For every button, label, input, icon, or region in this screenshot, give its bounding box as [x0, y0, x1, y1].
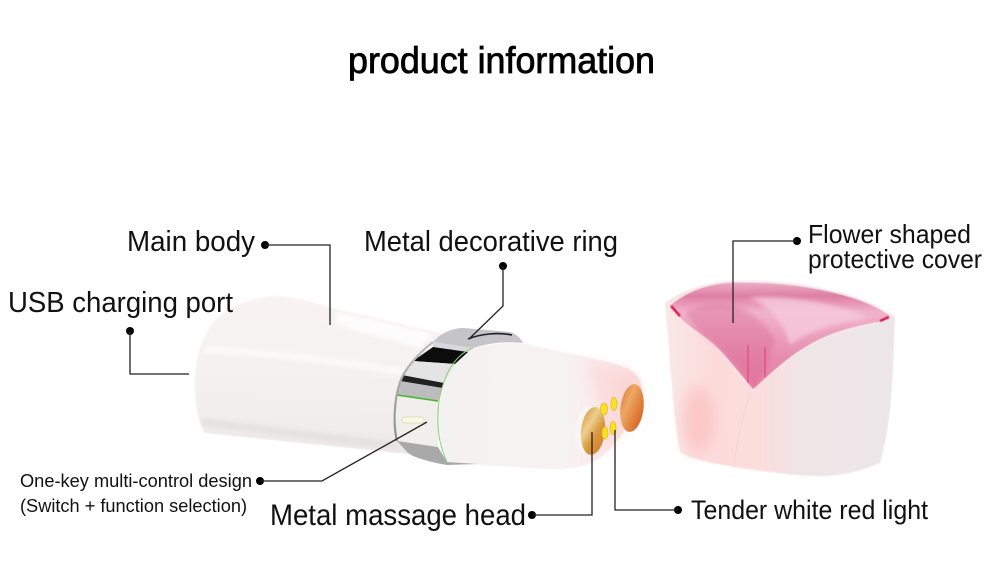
- label: one-key multi-control design: One-key multi-control design: [20, 470, 252, 491]
- red glow around head: [585, 362, 640, 458]
- label: metal decorative ring: Metal decorative ring: [364, 226, 618, 258]
- label: USB charging port: [8, 287, 233, 374]
- dome right lobe: [748, 297, 870, 345]
- label: main body: Main body: [127, 226, 255, 258]
- ring light band: [402, 361, 455, 383]
- product: flower shaped protective cover: [665, 281, 895, 476]
- label: one-key multi-control design: [20, 422, 427, 516]
- label: one-key multi-control design: (Switch + function selection): [20, 495, 247, 516]
- red glow on cup: [682, 386, 714, 454]
- label: USB charging port: USB charging port: [8, 287, 233, 319]
- label: flower shaped protective cover: [733, 219, 982, 323]
- label: metal massage head: [270, 432, 592, 532]
- label: flower shaped protective cover: protective cover: [808, 244, 982, 274]
- title: product information: [348, 40, 655, 81]
- massage end shell: [438, 343, 642, 469]
- label: flower shaped protective cover: Flower shaped: [808, 219, 971, 249]
- metal decorative ring: [395, 328, 523, 465]
- label: tender white red light: Tender white red light: [691, 495, 928, 525]
- ring lower band: [397, 441, 478, 465]
- petal seam: [734, 392, 750, 467]
- label: main body: [127, 226, 330, 325]
- green light lines: [397, 395, 438, 401]
- main body shell: [195, 296, 445, 454]
- dome inner ribs: [748, 345, 765, 383]
- cover cup: [665, 281, 895, 476]
- ring black band: [413, 347, 468, 364]
- metal massage head, orange: [618, 383, 646, 433]
- ring outer edge: [395, 342, 433, 441]
- label: tender white red light: [615, 430, 928, 525]
- white socket: [572, 405, 602, 455]
- yellow LED lights: [600, 398, 617, 439]
- dome red corners: [671, 306, 889, 321]
- ring bright band: [433, 342, 473, 353]
- metal massage head, gold: [579, 406, 607, 456]
- product: lipstick-shaped device: [195, 296, 646, 469]
- ring silver band: [397, 381, 442, 401]
- dome left lobe: [685, 305, 775, 388]
- label: metal decorative ring: [364, 226, 618, 338]
- label: metal massage head: Metal massage head: [270, 499, 526, 532]
- ring back rim: [433, 328, 523, 348]
- pink translucent dome: [670, 282, 890, 390]
- switch panel: [395, 395, 438, 447]
- ring dark strip: [400, 375, 444, 388]
- power button: [402, 417, 424, 423]
